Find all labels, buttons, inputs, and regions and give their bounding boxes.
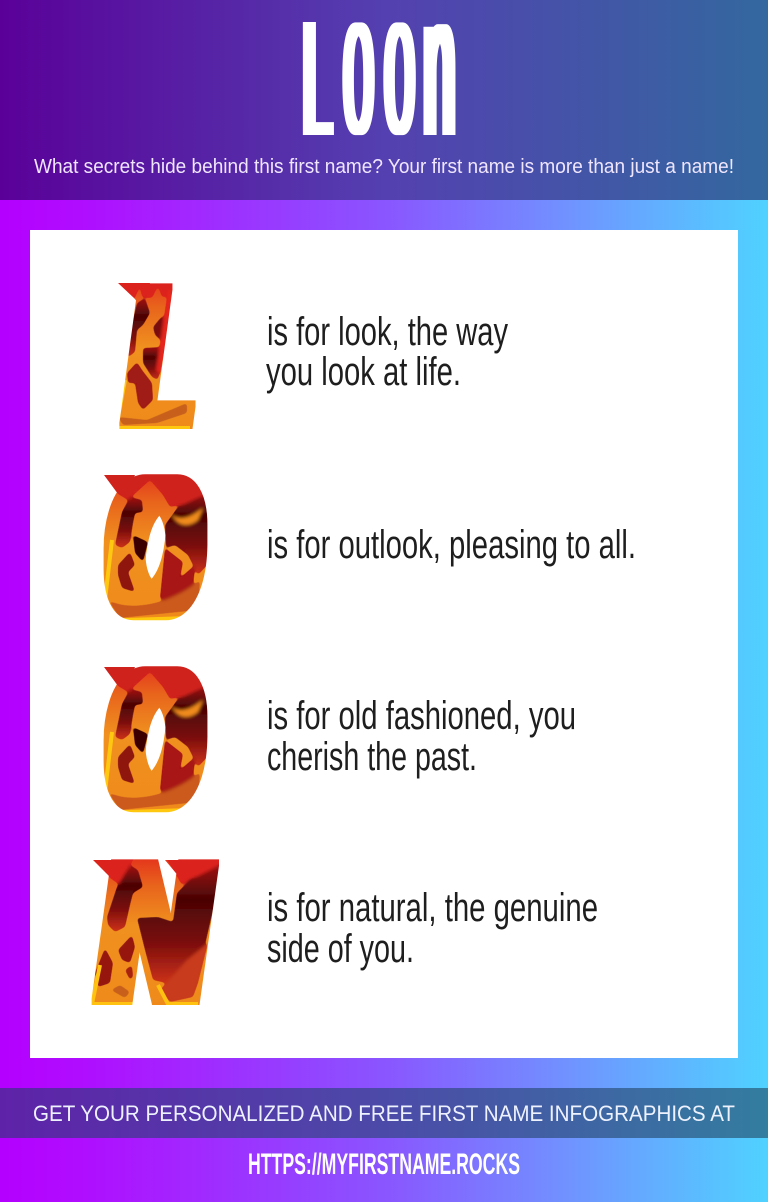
title: O: [342, 0, 375, 169]
footer band: [0, 1088, 768, 1138]
flame letter O, first: [104, 474, 208, 620]
header band: [0, 0, 768, 200]
text: second O line: [267, 694, 576, 779]
text: second O line: is for old fashioned, you: [267, 694, 576, 738]
footer url: HTTPS://MYFIRSTNAME.ROCKS: [248, 1148, 520, 1181]
text: L line: [266, 310, 508, 394]
text: second O line: cherish the past.: [267, 735, 477, 779]
footer band: GET YOUR PERSONALIZED AND FREE FIRST NAME INFOGRAPHICS AT: [33, 1101, 735, 1126]
text: N line: [267, 886, 598, 971]
subtitle: What secrets hide behind this first name? Your first name is more than just a name!: [34, 156, 734, 178]
text: N line: is for natural, the genuine: [267, 886, 598, 930]
flame letter N: [92, 859, 219, 1005]
text: N line: side of you.: [267, 927, 414, 971]
text: O line: is for outlook, pleasing to all.: [267, 523, 636, 567]
flame letter O, second: [104, 666, 208, 812]
title: O: [383, 0, 416, 169]
white content panel: [30, 230, 738, 1058]
title: [302, 0, 457, 183]
icon: flame letter L: [118, 283, 196, 429]
text: L line: is for look, the way: [267, 310, 508, 354]
text: L line: you look at life.: [266, 350, 461, 394]
